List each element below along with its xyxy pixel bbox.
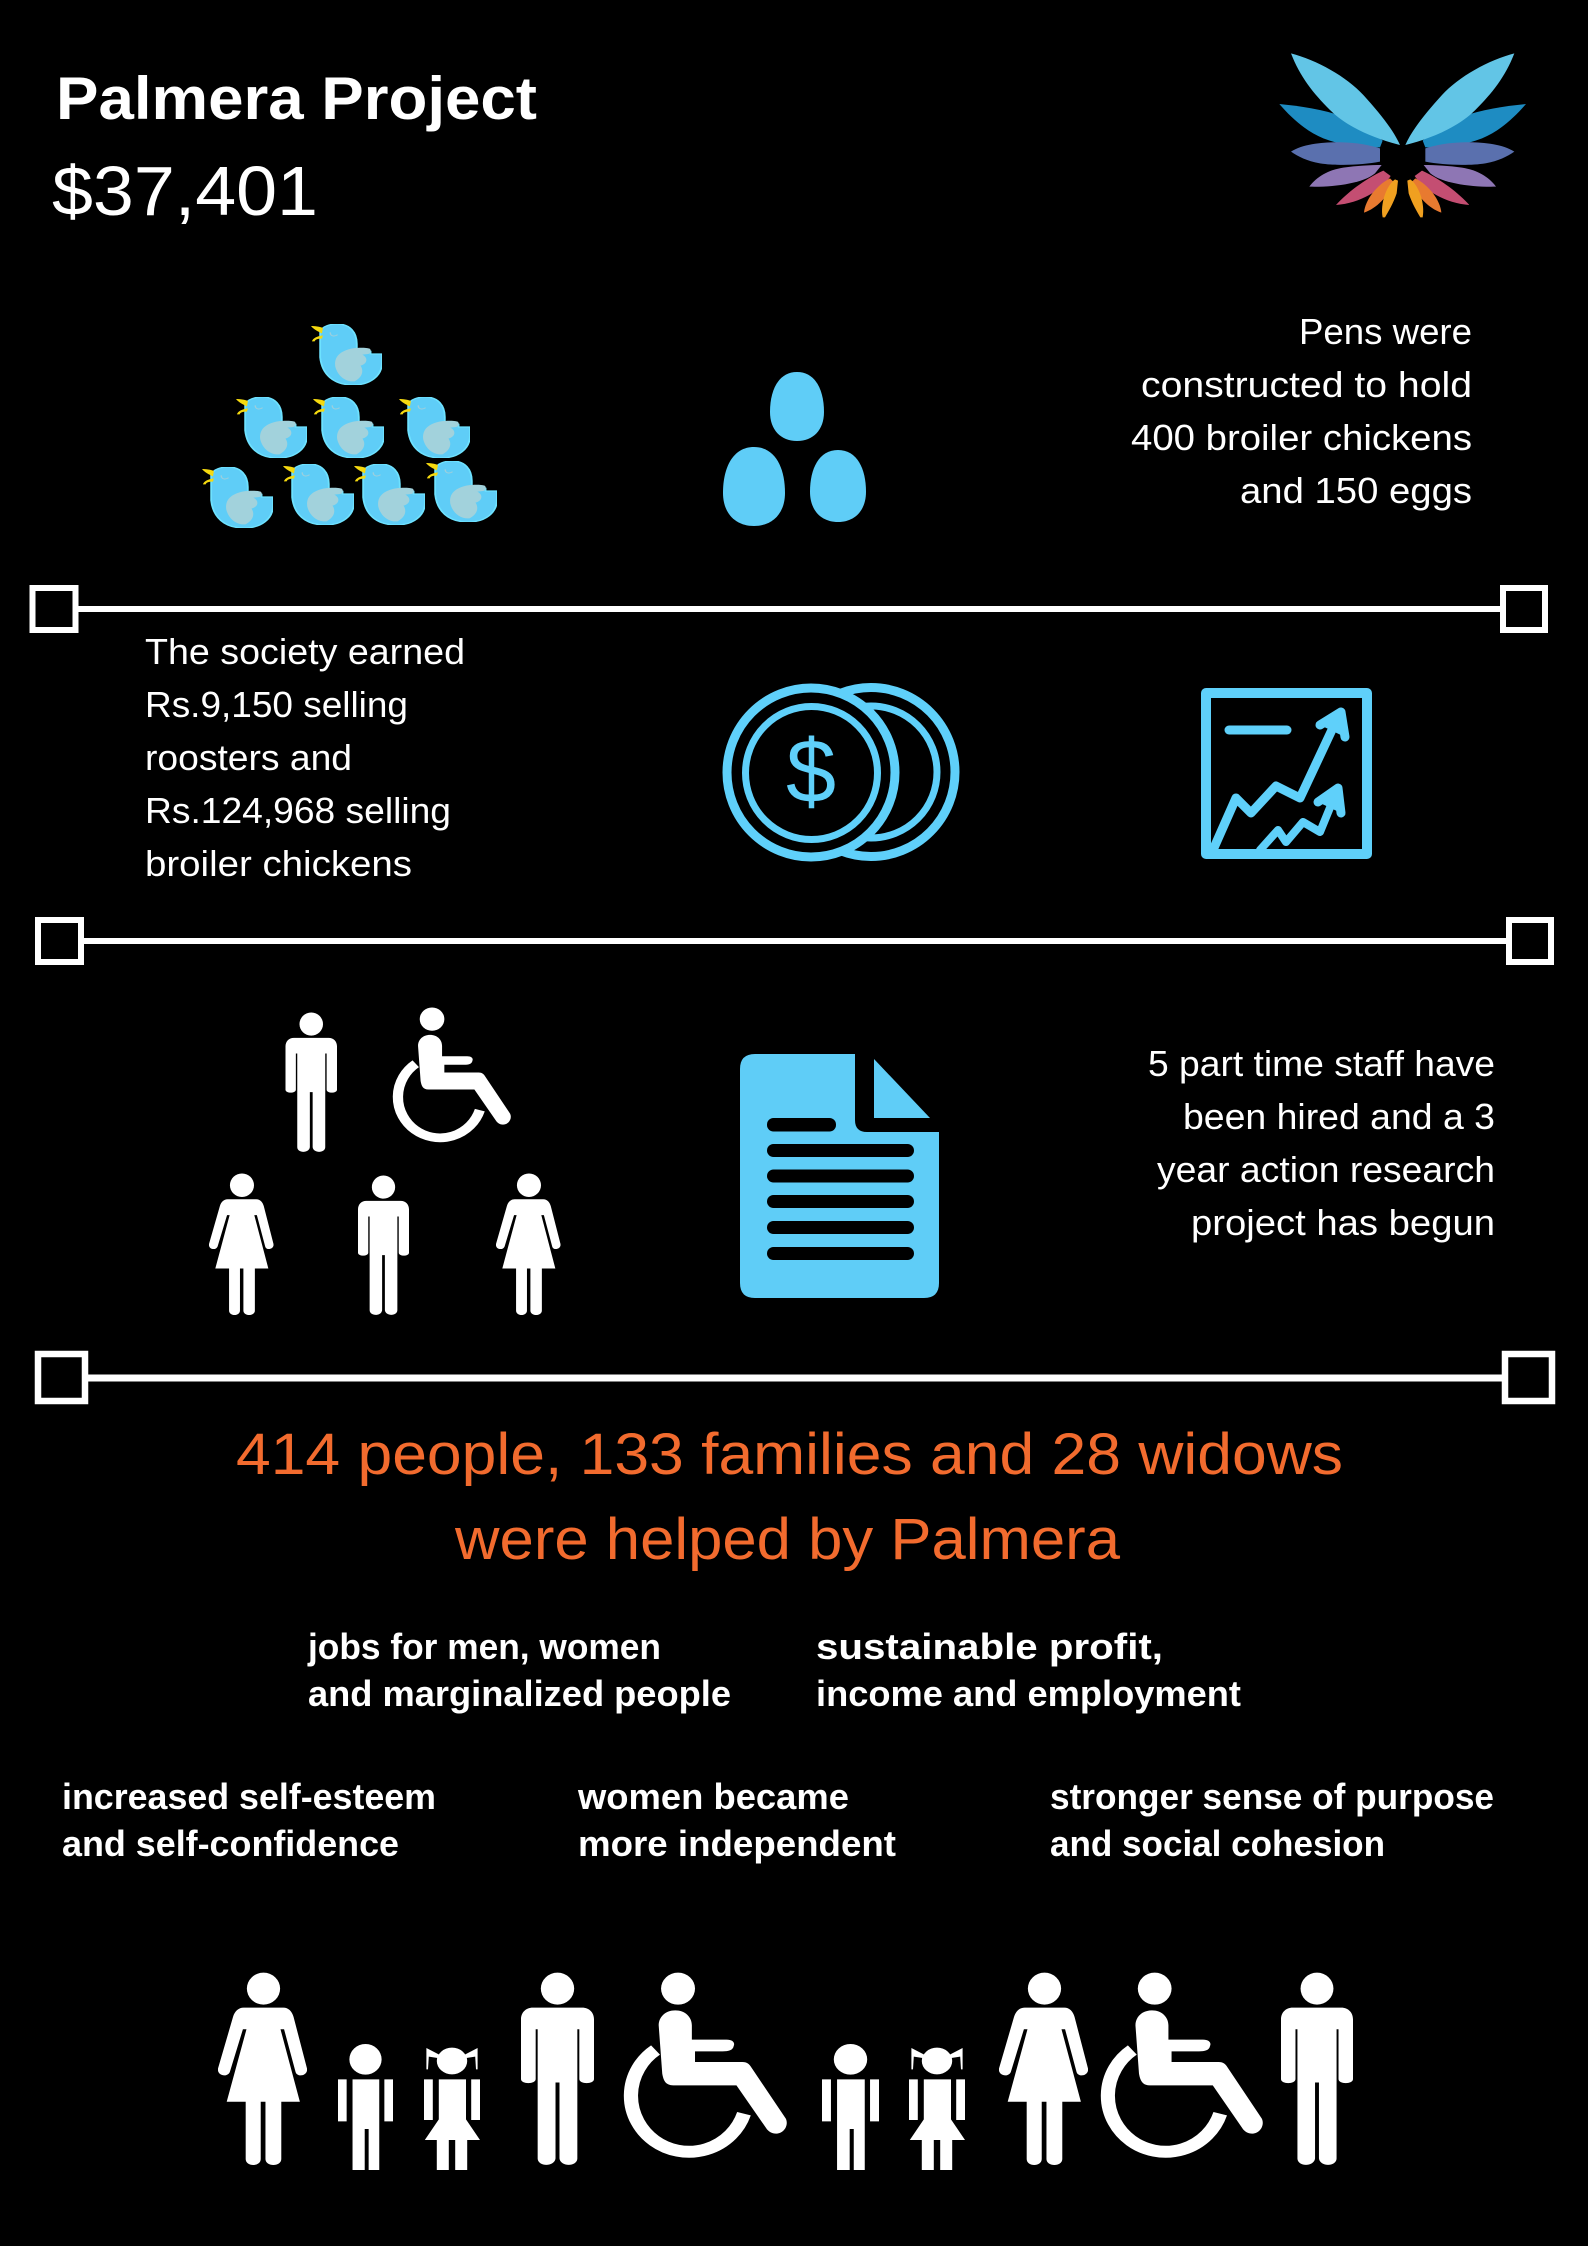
text: society earnings: roosters and [145,737,352,778]
icon row: community figures [218,1973,1353,2170]
benefit: sustainable profit: income and employment [816,1673,1241,1714]
text: staff and research: year action research [1157,1149,1495,1190]
benefit: self-esteem: and self-confidence [62,1823,399,1864]
divider 3 [38,1354,1552,1401]
icon: coins [727,688,955,857]
text: staff and research: project has begun [1191,1202,1495,1243]
icon group: chickens [202,324,497,528]
logo: Palmera wings [1279,53,1526,217]
text: pens constructed: 400 broiler chickens [1131,417,1472,458]
benefit: jobs: jobs for men, women [307,1626,661,1667]
icon group: staff [209,1007,561,1315]
benefit: independence: more independent [578,1823,896,1864]
text: staff and research [1148,1043,1495,1243]
heading: people helped: were helped by Palmera [454,1507,1121,1572]
divider 1 [32,588,1545,630]
benefit: sense of purpose: stronger sense of purpose [1050,1776,1494,1817]
text: society earnings: Rs.9,150 selling [145,684,408,725]
text: pens constructed: and 150 eggs [1240,470,1472,511]
benefit: sustainable profit: sustainable profit, [816,1626,1163,1667]
benefit: self-esteem: increased self-esteem [62,1776,436,1817]
text: staff and research: been hired and a 3 [1183,1096,1495,1137]
text: society earnings: Rs.124,968 selling [145,790,451,831]
funding amount: $37,401 [52,152,318,230]
icon: growth chart [1206,693,1367,854]
benefit: independence: women became [577,1776,849,1817]
benefit: sense of purpose: and social cohesion [1050,1823,1385,1864]
benefit: independence [577,1776,896,1864]
heading: people helped: 414 people, 133 families and 28 widows [236,1422,1343,1487]
benefit: jobs [307,1626,731,1714]
text: pens constructed: constructed to hold [1141,364,1472,405]
text: society earnings: The society earned [145,631,465,672]
icon: document [740,1054,939,1298]
text: society earnings: broiler chickens [145,843,412,884]
text: society earnings [145,631,465,884]
benefit: sense of purpose [1050,1776,1494,1864]
text: pens constructed [1131,311,1472,511]
benefit: self-esteem [62,1776,436,1864]
text: pens constructed: Pens were [1299,311,1472,352]
divider 2 [38,920,1551,962]
benefit: sustainable profit [816,1626,1241,1714]
title: Palmera Project [56,65,537,132]
benefit: jobs: and marginalized people [308,1673,731,1714]
heading: people helped [236,1422,1343,1572]
text: staff and research: 5 part time staff have [1148,1043,1495,1084]
icon: coins: $ [786,722,836,822]
icon group: eggs [723,372,866,526]
